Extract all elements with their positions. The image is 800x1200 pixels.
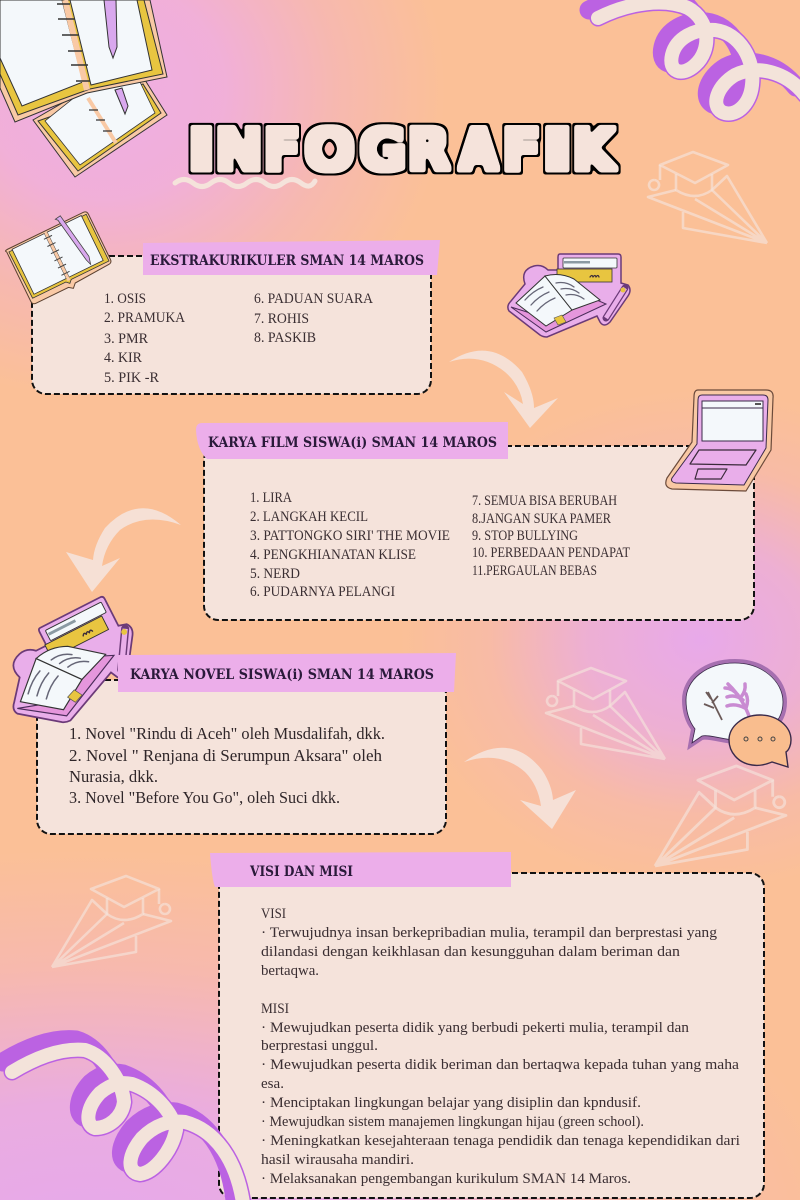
title: G	[360, 118, 406, 184]
list left: 1. OSIS	[104, 291, 146, 307]
title squiggle	[175, 180, 315, 186]
panel heading	[143, 240, 440, 275]
icon: paper plane middle	[546, 668, 665, 759]
list right: 7. SEMUA BISA BERUBAH	[472, 493, 617, 509]
misi text: · Melaksanakan pengembangan kurikulum SMAN 14 Maros.	[261, 1171, 631, 1187]
arrow: panel 3 to panel 4	[464, 748, 576, 829]
icon: book stack with pencil	[0, 591, 156, 741]
panel: karya film	[196, 422, 754, 620]
title: A	[460, 118, 498, 184]
icon: paper plane top right	[648, 152, 767, 243]
panel heading	[210, 852, 511, 887]
panel background	[219, 873, 764, 1198]
title	[186, 118, 616, 184]
list left	[104, 291, 185, 386]
title: N	[215, 118, 263, 184]
list left: 2. PRAMUKA	[104, 310, 185, 326]
misi text: · Mewujudkan peserta didik yang berbudi pekerti mulia, terampil dan	[261, 1020, 689, 1036]
list right: 8.JANGAN SUKA PAMER	[472, 511, 611, 527]
visi text: dilandasi dengan keikhlasan dan kesungguhan dalam beriman dan	[261, 944, 681, 960]
title: I	[539, 118, 576, 184]
misi text	[261, 1001, 740, 1187]
list left	[250, 490, 450, 600]
misi text: · Meningkatkan kesejahteraan tenaga pendidik dan tenaga kependidikan dari	[261, 1133, 740, 1149]
list right	[254, 291, 373, 346]
list right	[472, 493, 630, 579]
panel heading	[196, 422, 508, 459]
misi text: · Mewujudkan peserta didik beriman dan bertaqwa kepada tuhan yang maha	[261, 1057, 739, 1073]
panel heading	[118, 653, 456, 692]
list right: 7. ROHIS	[254, 311, 309, 327]
panel heading: KARYA FILM SISWA(i) SMAN 14 MAROS	[208, 435, 497, 451]
upper notebook	[0, 0, 167, 122]
novel list: 1. Novel "Rindu di Aceh" oleh Musdalifah, dkk.	[69, 724, 385, 743]
panel background	[204, 446, 754, 620]
icon: top-right ribbon	[589, 0, 800, 115]
list left: 5. PIK -R	[104, 370, 159, 386]
panel: ekstrakurikuler	[32, 240, 440, 394]
list right: 11.PERGAULAN BEBAS	[472, 563, 597, 579]
list left: 1. LIRA	[250, 490, 292, 506]
panel heading: KARYA NOVEL SISWA(i) SMAN 14 MAROS	[130, 667, 434, 683]
icon: bottom-left ribbon	[3, 1040, 244, 1200]
list left: 2. LANGKAH KECIL	[250, 509, 368, 525]
list left: 3. PATTONGKO SIRI' THE MOVIE	[250, 528, 450, 544]
panel: karya novel	[0, 591, 456, 834]
icon: laptop	[666, 390, 773, 491]
list left: 5. NERD	[250, 566, 300, 582]
novel list	[69, 724, 385, 807]
icon: paper plane lower left	[52, 876, 171, 967]
title: I	[186, 118, 217, 184]
icon: small notebook	[2, 204, 115, 308]
lower notebook	[33, 80, 167, 177]
novel list: 2. Novel " Renjana di Serumpun Aksara" oleh	[69, 746, 382, 765]
list left: 6. PUDARNYA PELANGI	[250, 584, 395, 600]
icon: speech bubbles	[684, 661, 791, 767]
arrow: panel 2 to panel 3	[66, 508, 181, 592]
panel background	[32, 256, 431, 394]
misi text: hasil wirausaha mandiri.	[261, 1152, 414, 1168]
panel background	[37, 680, 446, 834]
list left: 3. PMR	[104, 331, 148, 347]
panel heading: VISI DAN MISI	[249, 864, 353, 880]
list left: 4. KIR	[104, 350, 142, 366]
misi text: berprestasi unggul.	[261, 1038, 378, 1054]
misi text: MISI	[261, 1001, 289, 1017]
novel list: 3. Novel "Before You Go", oleh Suci dkk.	[69, 788, 340, 807]
icon: open notebooks with pens	[0, 0, 167, 177]
panel heading: EKSTRAKURIKULER SMAN 14 MAROS	[150, 253, 424, 269]
visi text: · Terwujudnya insan berkepribadian mulia, terampil dan berprestasi yang	[261, 925, 718, 941]
novel list: Nurasia, dkk.	[69, 767, 158, 786]
icon: books and open book	[508, 254, 630, 337]
visi text	[261, 906, 718, 979]
list right: 6. PADUAN SUARA	[254, 291, 373, 307]
icon: paper plane lower right	[655, 766, 786, 866]
panel: visi dan misi	[210, 852, 764, 1198]
misi text: · Menciptakan lingkungan belajar yang disiplin dan kpndusif.	[261, 1095, 641, 1111]
title: F	[502, 118, 541, 184]
list right: 9. STOP BULLYING	[472, 528, 578, 544]
title: K	[572, 118, 616, 184]
title: O	[304, 118, 355, 184]
arrow: panel 1 to panel 2	[449, 351, 558, 428]
title: R	[407, 118, 450, 184]
misi text: · Mewujudkan sistem manajemen lingkungan hijau (green school).	[261, 1114, 644, 1130]
list left: 4. PENGKHIANATAN KLISE	[250, 547, 416, 563]
list right: 8. PASKIB	[254, 330, 316, 346]
visi text: bertaqwa.	[261, 963, 319, 979]
misi text: esa.	[261, 1076, 284, 1092]
title: F	[264, 118, 300, 184]
visi text: VISI	[261, 906, 286, 922]
list right: 10. PERBEDAAN PENDAPAT	[472, 545, 630, 561]
